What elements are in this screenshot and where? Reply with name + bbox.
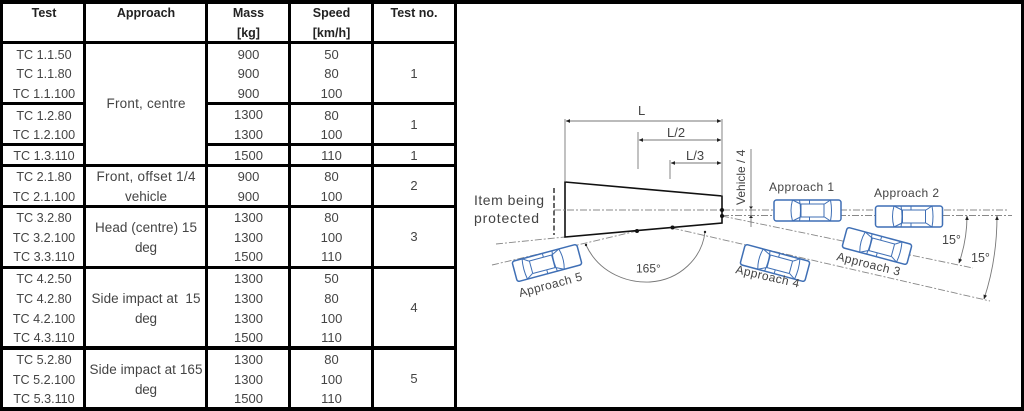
speed column: 80 <box>324 210 339 225</box>
test column: TC 4.3.110 <box>13 331 75 345</box>
speed column: 110 <box>321 249 342 264</box>
mass column: 900 <box>238 189 259 204</box>
impact points <box>635 208 724 233</box>
header row: Mass <box>233 6 264 20</box>
test column: TC 1.2.100 <box>13 128 75 142</box>
test column: TC 4.2.80 <box>16 292 72 306</box>
dimension vehicle / 4: Vehicle / 4 <box>734 149 748 205</box>
speed column: 110 <box>321 330 342 345</box>
header row: [km/h] <box>313 26 350 40</box>
dimension vehicle / 4 <box>734 149 753 227</box>
header row <box>3 4 454 41</box>
approach 3 <box>835 227 912 279</box>
mass column: 1300 <box>234 210 263 225</box>
angle 15 degrees inner <box>942 216 967 263</box>
approach column: Side impact at 15 <box>92 291 200 306</box>
diagram panel <box>457 4 1021 407</box>
speed column: 100 <box>321 86 342 101</box>
speed column: 50 <box>324 47 339 62</box>
approach 2 <box>874 186 942 227</box>
speed column <box>291 44 371 407</box>
approach 1 <box>769 180 841 221</box>
dimension L/3: L/3 <box>686 148 704 163</box>
speed column: 80 <box>324 66 339 81</box>
mass column: 1500 <box>234 330 263 345</box>
header row: Test <box>32 6 57 20</box>
test number column: 1 <box>410 66 418 81</box>
test column: TC 1.1.80 <box>16 67 72 81</box>
mass column: 900 <box>238 47 259 62</box>
dimension L/2 <box>638 125 721 169</box>
angle 165 degrees <box>585 231 706 282</box>
test column: TC 1.1.50 <box>16 48 72 62</box>
approach 5: Approach 5 <box>517 269 584 300</box>
mass column: 1500 <box>234 391 263 406</box>
approach 5 <box>512 244 584 300</box>
header row: Speed <box>313 6 350 20</box>
test column: TC 4.2.50 <box>16 272 72 286</box>
mass column: 1300 <box>234 372 263 387</box>
dimension L <box>565 103 722 196</box>
speed column: 100 <box>321 189 342 204</box>
mass column: 900 <box>238 86 259 101</box>
test column <box>3 44 83 407</box>
mass column: 1500 <box>234 249 263 264</box>
speed column: 100 <box>321 311 342 326</box>
speed column: 80 <box>324 169 339 184</box>
mass column: 1300 <box>234 311 263 326</box>
approach column: deg <box>135 311 157 326</box>
approach 1: Approach 1 <box>769 180 834 194</box>
crash cushion outline <box>565 182 722 237</box>
approach 3: Approach 3 <box>835 249 902 279</box>
approach column: Front, offset 1/4 <box>96 169 196 184</box>
approach column: Head (centre) 15 <box>95 220 197 235</box>
test number column: 1 <box>410 117 418 132</box>
angle 165 degrees: 165° <box>636 262 661 276</box>
item being protected marker: Item being <box>474 192 544 208</box>
speed column: 80 <box>324 352 339 367</box>
mass column <box>208 44 288 407</box>
test number column <box>374 44 454 407</box>
test column: TC 5.3.110 <box>13 392 75 406</box>
test number column: 4 <box>410 300 418 315</box>
speed column: 100 <box>321 127 342 142</box>
mass column: 1300 <box>234 127 263 142</box>
header row: [kg] <box>237 26 260 40</box>
approach column <box>86 44 205 407</box>
angle 15 degrees inner: 15° <box>942 233 961 247</box>
speed column: 80 <box>324 291 339 306</box>
speed column: 110 <box>321 391 342 406</box>
test column: TC 5.2.80 <box>16 353 72 367</box>
approach 4 <box>734 244 810 291</box>
test column: TC 1.3.110 <box>13 149 75 163</box>
approach column: Front, centre <box>106 96 186 111</box>
dimension L/2: L/2 <box>667 125 685 140</box>
test column: TC 4.2.100 <box>13 312 75 326</box>
mass column: 1300 <box>234 107 263 122</box>
header row: Approach <box>117 6 175 20</box>
speed column: 110 <box>321 148 342 163</box>
test column: TC 3.3.110 <box>13 250 75 264</box>
speed column: 100 <box>321 372 342 387</box>
angle 15 degrees outer <box>971 216 997 299</box>
approach column: vehicle <box>125 189 167 204</box>
centre and approach lines <box>492 210 1012 301</box>
approach 2: Approach 2 <box>874 186 939 200</box>
speed column: 50 <box>324 271 339 286</box>
approach column: Side impact at 165 <box>90 362 202 377</box>
item being protected marker: protected <box>474 210 539 226</box>
angle 15 degrees outer: 15° <box>971 251 990 265</box>
mass column: 1300 <box>234 291 263 306</box>
test column: TC 3.2.100 <box>13 231 75 245</box>
approach 4: Approach 4 <box>734 262 801 291</box>
approach column: deg <box>135 382 157 397</box>
test column: TC 2.1.100 <box>13 190 75 204</box>
test number column: 1 <box>410 148 418 163</box>
test column: TC 5.2.100 <box>13 373 75 387</box>
test column: TC 2.1.80 <box>16 170 72 184</box>
speed column: 100 <box>321 230 342 245</box>
mass column: 900 <box>238 169 259 184</box>
item being protected marker <box>474 188 722 235</box>
dimension L: L <box>638 103 645 118</box>
approach column: deg <box>135 240 157 255</box>
mass column: 1300 <box>234 230 263 245</box>
test number column: 2 <box>410 178 418 193</box>
mass column: 1500 <box>234 148 263 163</box>
mass column: 1300 <box>234 271 263 286</box>
test column: TC 1.1.100 <box>13 87 75 101</box>
test number column: 5 <box>410 371 418 386</box>
mass column: 900 <box>238 66 259 81</box>
header row: Test no. <box>390 6 438 20</box>
mass column: 1300 <box>234 352 263 367</box>
test column: TC 1.2.80 <box>16 109 72 123</box>
test number column: 3 <box>410 229 418 244</box>
speed column: 80 <box>324 108 339 123</box>
table panel <box>0 0 457 411</box>
test column: TC 3.2.80 <box>16 211 72 225</box>
dimension L/3 <box>670 148 721 179</box>
